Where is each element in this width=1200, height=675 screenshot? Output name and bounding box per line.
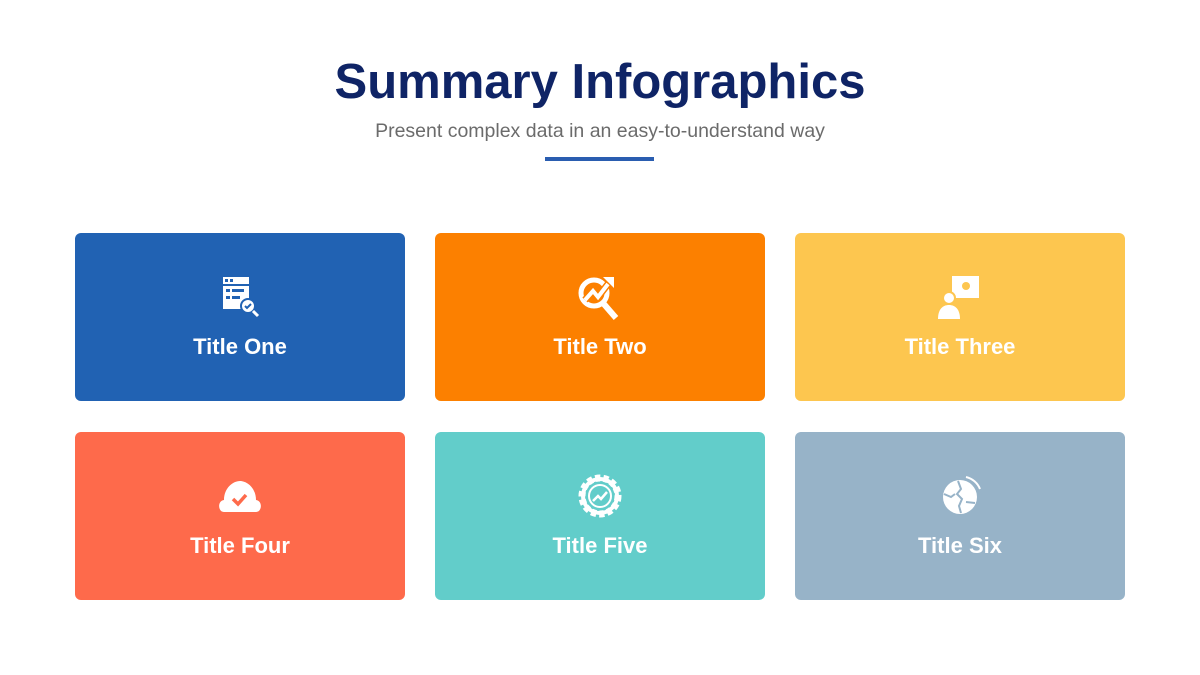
label: Title Five [553,533,647,558]
icon: growth magnifier [578,277,618,320]
card: title one [75,233,405,401]
title: Summary Infographics [335,55,865,109]
icon: cloud check [219,481,261,512]
label: Title One [193,334,287,359]
card: title two [435,233,765,401]
card: title five [435,432,765,600]
card: title six [795,432,1125,600]
icon: presenter [938,276,979,319]
card: title three [795,233,1125,401]
label: Title Six [918,533,1002,558]
subtitle: Present complex data in an easy-to-understand way [375,120,825,142]
icon: globe [943,476,981,514]
label: Title Three [905,334,1015,359]
icon: checklist search [223,277,259,317]
card: title four [75,432,405,600]
label: Title Four [190,533,290,558]
underline accent [545,157,654,161]
label: Title Two [553,334,647,359]
icon: gear growth [578,474,622,518]
